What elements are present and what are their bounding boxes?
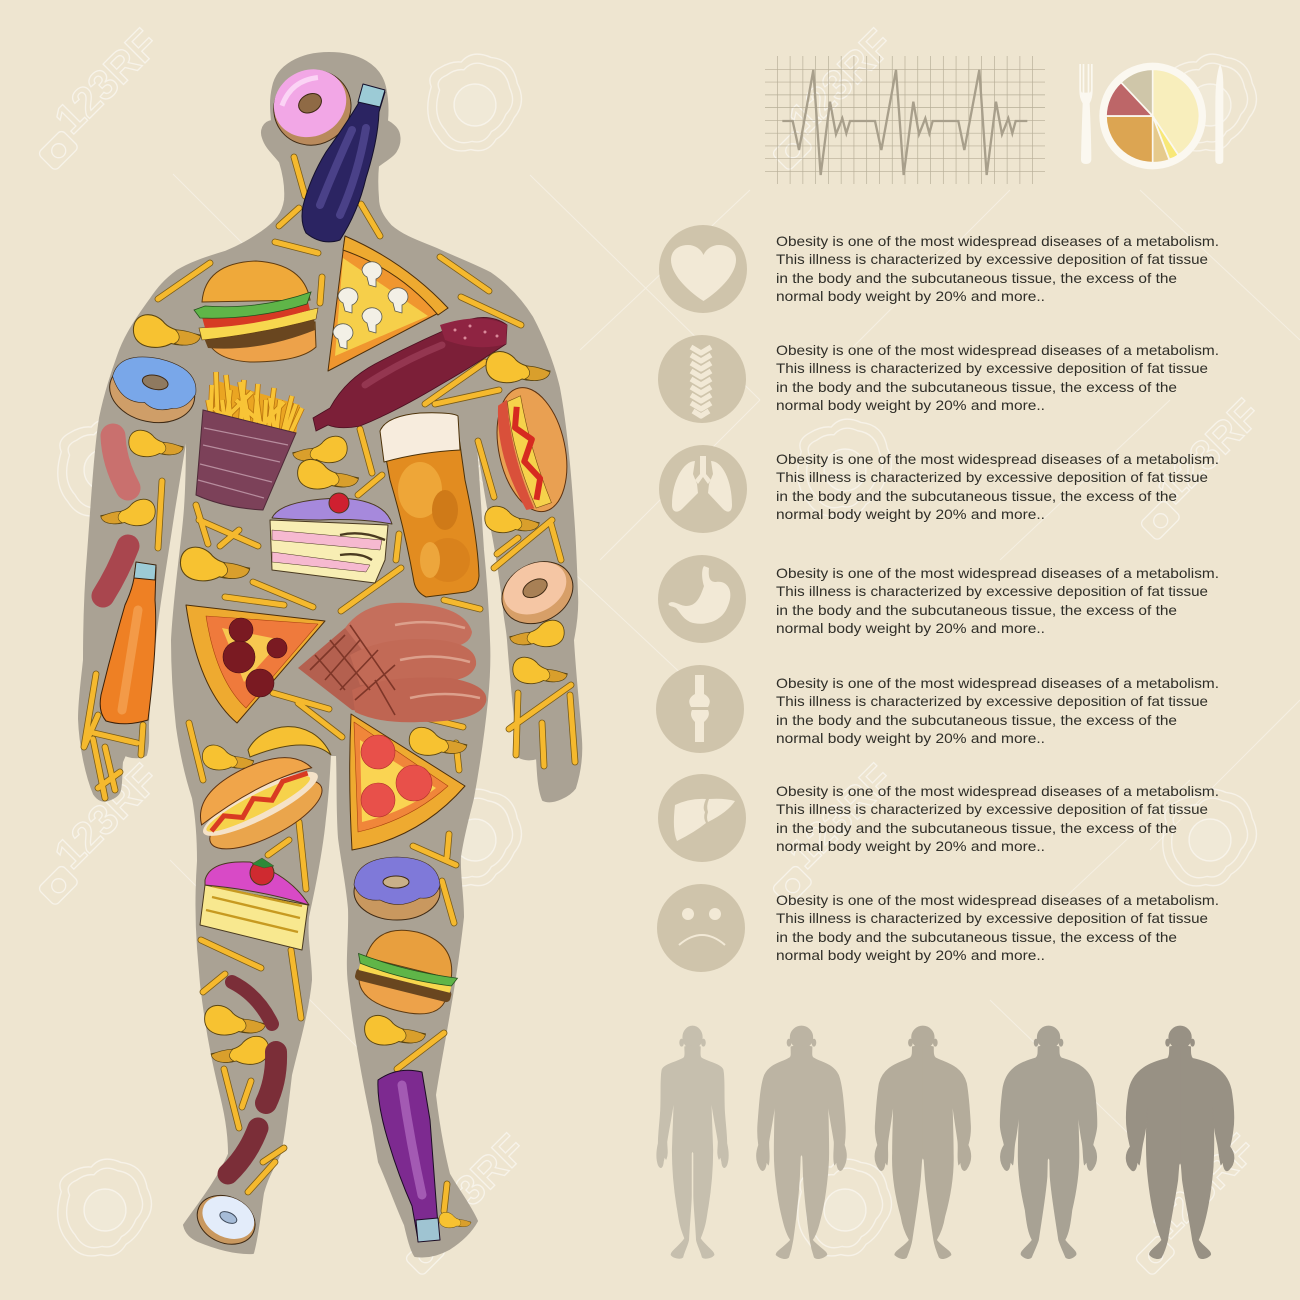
- pink donut: [260, 56, 364, 159]
- text block 3: [776, 451, 1219, 522]
- text block 7: This illness is characterized by excessive deposition of fat tissue: [776, 910, 1208, 926]
- hot dog upright: [487, 381, 577, 518]
- blue donut: [104, 350, 201, 430]
- sausage chain: [228, 982, 276, 1174]
- watermark pattern: 123RF: [1142, 1125, 1265, 1247]
- burger: [194, 261, 318, 362]
- text block 1: in the body and the subcutaneous tissue, the excess of the: [776, 270, 1177, 286]
- knife: [1215, 64, 1223, 164]
- second burger: [347, 920, 466, 1023]
- text block 7: normal body weight by 20% and more..: [776, 947, 1045, 963]
- watermark pattern: 123RF: [45, 20, 168, 142]
- chips: [101, 315, 567, 1228]
- fork: [1079, 64, 1093, 164]
- text block 6: in the body and the subcutaneous tissue, the excess of the: [776, 820, 1177, 836]
- text block 6: Obesity is one of the most widespread diseases of a metabolism.: [776, 783, 1219, 799]
- text block 2: Obesity is one of the most widespread diseases of a metabolism.: [776, 342, 1219, 358]
- obese body silhouette filled with fast food: [79, 53, 584, 1257]
- fries scattered: [84, 157, 575, 1211]
- text block 3: This illness is characterized by excessive deposition of fat tissue: [776, 469, 1208, 485]
- text block 6: normal body weight by 20% and more..: [776, 838, 1045, 854]
- chart grid: [765, 56, 1045, 184]
- hot dog diagonal: [186, 740, 333, 863]
- purple bottle: [378, 1070, 440, 1242]
- icon: sad face: [657, 884, 745, 972]
- watermark pattern: 123RF: [779, 20, 902, 142]
- text block 6: [776, 783, 1219, 854]
- pepperoni pizza slice: [186, 605, 325, 723]
- icon: stomach: [658, 555, 746, 643]
- watermark pattern: 123RF: [1147, 390, 1270, 512]
- text block 5: Obesity is one of the most widespread diseases of a metabolism.: [776, 675, 1219, 691]
- text block 5: normal body weight by 20% and more..: [776, 730, 1045, 746]
- text block 1: This illness is characterized by excessive deposition of fat tissue: [776, 251, 1208, 267]
- text block 7: in the body and the subcutaneous tissue, the excess of the: [776, 929, 1177, 945]
- silhouette 3: obese class I: [875, 1026, 971, 1259]
- orange bottle: [100, 562, 156, 724]
- dark sausage: [103, 546, 128, 596]
- pepper pizza slice: [350, 714, 465, 850]
- silhouette 2: overweight: [757, 1026, 846, 1259]
- text block 4: in the body and the subcutaneous tissue, the excess of the: [776, 602, 1177, 618]
- donut peach: [491, 550, 584, 636]
- icon: lungs: [659, 445, 747, 533]
- text block 3: Obesity is one of the most widespread diseases of a metabolism.: [776, 451, 1219, 467]
- silhouette 1: normal weight: [657, 1026, 728, 1258]
- text block 7: Obesity is one of the most widespread diseases of a metabolism.: [776, 892, 1219, 908]
- text block 4: Obesity is one of the most widespread diseases of a metabolism.: [776, 565, 1219, 581]
- mushroom pizza slice: [328, 236, 448, 371]
- icon: heart: [659, 225, 747, 313]
- text block 2: normal body weight by 20% and more..: [776, 397, 1045, 413]
- text block 3: in the body and the subcutaneous tissue, the excess of the: [776, 488, 1177, 504]
- cola bottle: [302, 84, 385, 242]
- white donut: [189, 1186, 263, 1253]
- silhouette 5: morbidly obese: [1126, 1026, 1234, 1259]
- text block 5: [776, 675, 1219, 746]
- body outline: [79, 53, 581, 1257]
- fries in a box: [196, 372, 302, 510]
- purple donut: [354, 857, 440, 920]
- watermark pattern: 123RF: [45, 755, 168, 877]
- body silhouette progression: [657, 1026, 1234, 1259]
- strawberry cake: [200, 858, 309, 950]
- beer glass: [380, 413, 479, 597]
- plate with food pie chart, fork and knife: [1079, 63, 1223, 169]
- text block 7: [776, 892, 1219, 963]
- icon: knee joint: [656, 665, 744, 753]
- pie sectors: [1106, 69, 1199, 163]
- icon: liver: [658, 774, 746, 862]
- text block 5: in the body and the subcutaneous tissue, the excess of the: [776, 712, 1177, 728]
- text block 1: normal body weight by 20% and more..: [776, 288, 1045, 304]
- salami: [313, 317, 507, 431]
- watermark pattern: 123RF: [412, 1125, 535, 1247]
- text block 4: This illness is characterized by excessive deposition of fat tissue: [776, 583, 1208, 599]
- text block 2: in the body and the subcutaneous tissue, the excess of the: [776, 379, 1177, 395]
- plate ring: [1099, 63, 1206, 169]
- light sausage: [113, 436, 128, 488]
- layered cake with cherry: [270, 493, 392, 583]
- text block 2: [776, 342, 1219, 413]
- text block 6: This illness is characterized by excessive deposition of fat tissue: [776, 801, 1208, 817]
- icon: spine: [658, 335, 746, 423]
- text block 4: normal body weight by 20% and more..: [776, 620, 1045, 636]
- heartbeat line: [782, 70, 1027, 175]
- text block 3: normal body weight by 20% and more..: [776, 506, 1045, 522]
- text block 2: This illness is characterized by excessive deposition of fat tissue: [776, 360, 1208, 376]
- ECG heartbeat chart: [765, 56, 1045, 184]
- text block 5: This illness is characterized by excessive deposition of fat tissue: [776, 693, 1208, 709]
- watermark pattern: 123RF: [412, 390, 535, 512]
- text block 1: [776, 233, 1219, 304]
- watermark pattern: 123RF: [779, 755, 902, 877]
- silhouette 4: obese class II: [1000, 1026, 1097, 1259]
- text block 4: [776, 565, 1219, 636]
- text block 1: Obesity is one of the most widespread diseases of a metabolism.: [776, 233, 1219, 249]
- sausage pile: [298, 603, 486, 722]
